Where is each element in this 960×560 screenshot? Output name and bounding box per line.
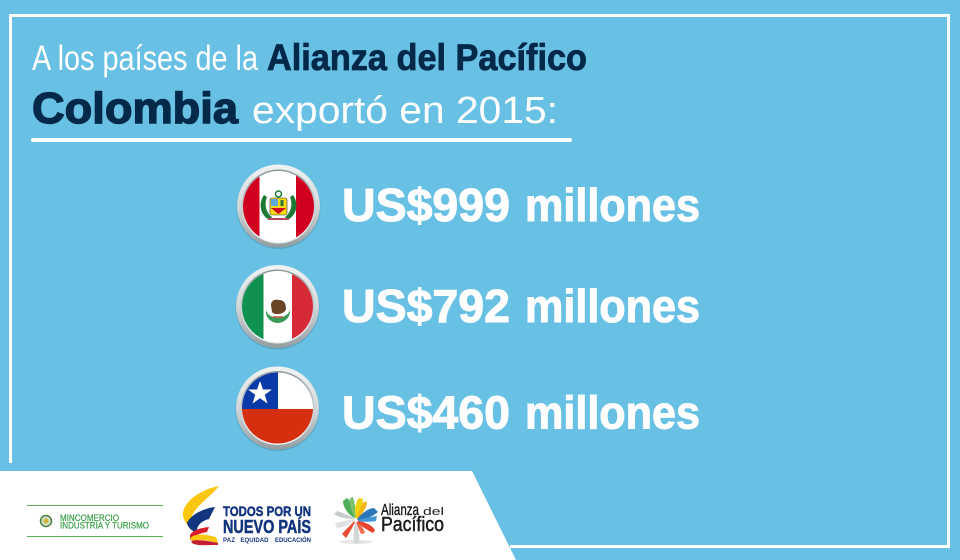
amount: Peru: US$999 — [342, 179, 510, 231]
amount: Mexico: millones — [525, 280, 700, 332]
amount: Chile: millones — [525, 386, 700, 438]
coat of arms — [261, 191, 296, 220]
logo: Todos por un nuevo país: EQUIDAD — [240, 538, 269, 544]
logo: Todos por un nuevo país: TODOS POR UN — [223, 503, 311, 519]
amount: Mexico: US$792 — [342, 280, 510, 332]
row: Chile — [236, 366, 700, 451]
heading line 2: exportó en 2015: — [252, 90, 558, 132]
row: Peru — [236, 164, 700, 249]
amount: Chile — [342, 386, 700, 438]
logo: Alianza del Pacífico: Alianza — [381, 502, 419, 519]
logo: Todos por un nuevo país — [183, 486, 311, 545]
logo: Mincomercio: INDUSTRIA Y TURISMO — [60, 520, 149, 530]
amount: Mexico — [342, 280, 700, 332]
logo: Todos por un nuevo país: PAZ — [223, 538, 235, 544]
logo: Mincomercio — [27, 506, 163, 536]
logo: Alianza del Pacífico: del — [423, 506, 444, 518]
heading — [32, 37, 587, 133]
amount: Chile: US$460 — [342, 386, 510, 438]
logo: Todos por un nuevo país: NUEVO PAÍS — [223, 516, 311, 537]
heading line 1 — [32, 37, 587, 78]
amount: Peru: millones — [525, 179, 700, 231]
eagle emblem — [266, 300, 290, 323]
logo: Mincomercio: MINCOMERCIO — [60, 513, 119, 523]
heading line 1: Alianza del Pacífico — [267, 37, 587, 78]
logo: Todos por un nuevo país: EDUCACIÓN — [275, 536, 311, 544]
icon: Chile flag badge — [236, 366, 320, 451]
footer panel — [0, 471, 516, 560]
heading line 2 — [32, 84, 558, 133]
heading underline — [31, 138, 572, 142]
row: Mexico — [236, 265, 700, 350]
logo: Alianza del Pacífico: Pacífico — [381, 514, 444, 536]
amount: Peru — [342, 179, 700, 231]
heading line 1: A los países de la — [32, 39, 258, 78]
icon: Mexico flag badge — [236, 265, 320, 350]
icon: Peru flag badge — [236, 164, 320, 249]
heading line 2: Colombia — [32, 84, 239, 133]
logo: Alianza del Pacífico — [334, 497, 444, 544]
